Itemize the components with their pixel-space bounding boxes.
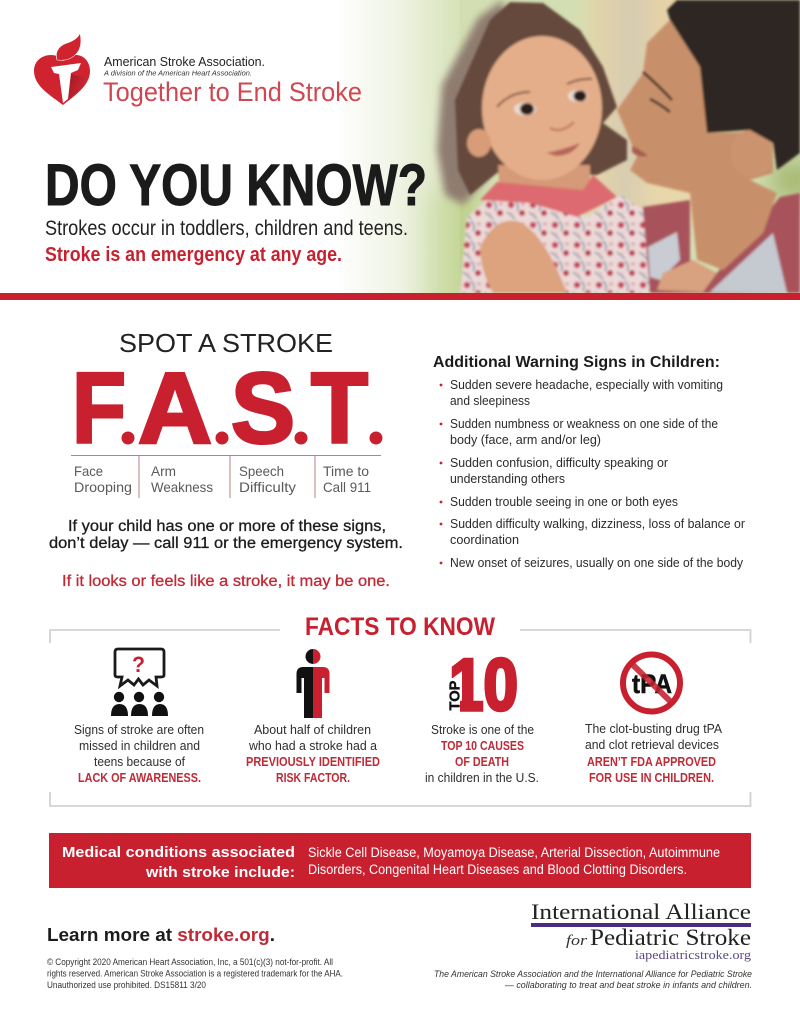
icon: half black half red person	[296, 649, 330, 718]
call to action: don’t delay — call 911 or the emergency system.	[49, 535, 403, 552]
FAST acronym: .	[298, 407, 309, 451]
text: and clot retrieval devices	[585, 737, 719, 752]
band list: Sickle Cell Disease, Moyamoya Disease, Arterial Dissection, Autoimmune	[308, 845, 720, 860]
girl's neck	[496, 163, 592, 191]
speech difficulty: Difficulty	[239, 479, 296, 495]
text: missed in children and	[79, 738, 200, 753]
time to call 911	[323, 463, 371, 495]
FAST acronym: .	[372, 407, 384, 451]
text: LACK OF AWARENESS.	[78, 771, 201, 785]
boy's brow and eye	[643, 72, 672, 112]
fact: top 10 causes	[425, 645, 539, 785]
photo: toddler girl and older brother	[354, 0, 800, 293]
girl's face	[482, 36, 602, 180]
text: in children in the U.S.	[425, 770, 539, 785]
icon: top 10: 10	[449, 645, 518, 726]
panel: medical conditions band	[49, 833, 751, 888]
heading: SPOT A STROKE	[119, 328, 333, 358]
time to call 911: Time to	[323, 463, 369, 479]
copyright: rights reserved. American Stroke Association is a registered trademark for the AHA.	[47, 968, 343, 978]
bullet list: Sudden difficulty walking, dizziness, loss of balance or	[450, 516, 746, 531]
bullet list: Sudden severe headache, especially with vomiting	[450, 377, 723, 392]
arm weakness	[151, 463, 213, 495]
band heading	[62, 844, 295, 881]
boy's hand	[657, 260, 717, 292]
icon: prohibited tPA: tPA	[632, 669, 672, 699]
heading: FACTS TO KNOW	[305, 613, 495, 641]
FAST acronym: .	[124, 407, 136, 451]
time to call 911: Call 911	[323, 479, 371, 495]
red divider bar	[0, 293, 800, 300]
FAST acronym: F	[72, 352, 126, 464]
FAST acronym: T	[311, 352, 368, 464]
copyright	[47, 957, 343, 990]
text: Signs of stroke are often	[74, 722, 204, 737]
organisation name: American Stroke Association.	[104, 54, 265, 69]
FAST acronym	[72, 352, 384, 464]
text: who had a stroke had a	[248, 738, 378, 753]
boy's ear	[742, 128, 770, 142]
text	[74, 722, 204, 785]
logo: International Alliance for Pediatric Stroke: iapediatricstroke.org	[635, 948, 752, 962]
girl's loose hair edge	[437, 0, 510, 205]
learn more link: Learn more at stroke.org.	[47, 925, 275, 945]
band list: Disorders, Congenital Heart Diseases and Blood Clotting Disorders.	[308, 862, 687, 877]
boy's mouth	[632, 146, 648, 156]
fact: tPA not approved	[585, 654, 722, 785]
girl's nose and mouth	[550, 122, 574, 130]
girl's arm	[480, 221, 567, 293]
girl's hair	[455, 2, 627, 195]
speech difficulty	[239, 463, 296, 495]
face drooping	[74, 463, 132, 495]
FAST rules	[71, 455, 381, 498]
band heading: with stroke include:	[145, 864, 295, 881]
face drooping: Drooping	[74, 479, 132, 495]
bullet list: understanding others	[450, 471, 565, 486]
boy's face	[617, 20, 777, 270]
bullet list: coordination	[450, 532, 519, 547]
panel: spot a stroke FAST	[49, 328, 403, 590]
boy's hair	[667, 0, 800, 170]
girl's collar	[480, 175, 617, 217]
boy's shirt	[643, 193, 800, 293]
icon: heart and torch	[34, 33, 90, 105]
bullet list: New onset of seizures, usually on one side of the body	[450, 555, 743, 570]
bullet list: Sudden confusion, difficulty speaking or	[450, 455, 669, 470]
collaboration statement	[434, 969, 752, 991]
text: TOP 10 CAUSES	[441, 739, 524, 753]
text	[425, 722, 539, 785]
tagline: Together to End Stroke	[103, 77, 362, 107]
logo: International Alliance for Pediatric Stroke: for	[566, 933, 587, 949]
heading: Additional Warning Signs in Children:	[433, 354, 720, 371]
call to action: If your child has one or more of these signs,	[68, 518, 386, 535]
logo: American Stroke Association	[34, 33, 362, 107]
bullet list	[440, 377, 746, 570]
band list	[308, 845, 720, 877]
girl's eyes	[514, 102, 536, 116]
text: FOR USE IN CHILDREN.	[589, 771, 714, 785]
logo: International Alliance for Pediatric Stroke	[531, 899, 752, 962]
text: OF DEATH	[455, 755, 509, 769]
logo: International Alliance for Pediatric Stroke: Pediatric Stroke	[590, 925, 751, 950]
logo: International Alliance for Pediatric Stroke: International Alliance	[531, 899, 751, 924]
band heading: Medical conditions associated	[62, 844, 295, 861]
arm weakness: Weakness	[151, 479, 213, 495]
icon: speech bubble and audience: ?	[132, 652, 145, 677]
call to action	[49, 518, 403, 552]
bullet list: body (face, arm and/or leg)	[450, 432, 601, 447]
FAST acronym: .	[218, 407, 230, 451]
collaboration statement: — collaborating to treat and beat stroke in infants and children.	[504, 980, 752, 991]
subtitle: Strokes occur in toddlers, children and teens.	[45, 217, 408, 240]
panel: additional warning signs	[433, 354, 746, 570]
icon: top 10: TOP	[446, 680, 464, 710]
copyright: © Copyright 2020 American Heart Association, Inc, a 501(c)(3) not-for-profit. All	[47, 957, 333, 967]
red reminder: If it looks or feels like a stroke, it may be one.	[62, 573, 390, 590]
text	[585, 721, 722, 785]
text: About half of children	[254, 722, 371, 737]
division line: A division of the American Heart Association.	[103, 68, 252, 78]
face drooping: Face	[74, 463, 103, 479]
text: AREN’T FDA APPROVED	[587, 755, 716, 769]
text: teens because of	[94, 754, 185, 769]
text: RISK FACTOR.	[276, 771, 350, 785]
fact: lack of awareness	[74, 649, 204, 785]
title: DO YOU KNOW?	[45, 153, 427, 218]
copyright: Unauthorized use prohibited. DS15811 3/20	[47, 980, 206, 990]
FAST acronym: A	[138, 352, 212, 464]
red subtitle: Stroke is an emergency at any age.	[45, 244, 342, 266]
text: Stroke is one of the	[431, 722, 534, 737]
bullet list: and sleepiness	[450, 393, 530, 408]
bullet list: Sudden trouble seeing in one or both eyes	[450, 494, 678, 509]
arm weakness: Arm	[151, 463, 176, 479]
speech difficulty: Speech	[239, 463, 284, 479]
fact: risk factor	[246, 649, 380, 785]
text: PREVIOUSLY IDENTIFIED	[246, 755, 380, 769]
text	[246, 722, 380, 785]
panel: facts to know	[50, 613, 750, 806]
girl's dress	[460, 192, 650, 293]
bullet list: Sudden numbness or weakness on one side of the	[450, 416, 718, 431]
text: The clot-busting drug tPA	[585, 721, 722, 736]
collaboration statement: The American Stroke Association and the International Alliance for Pediatric Stroke	[434, 969, 752, 980]
FAST acronym: S	[231, 352, 295, 464]
